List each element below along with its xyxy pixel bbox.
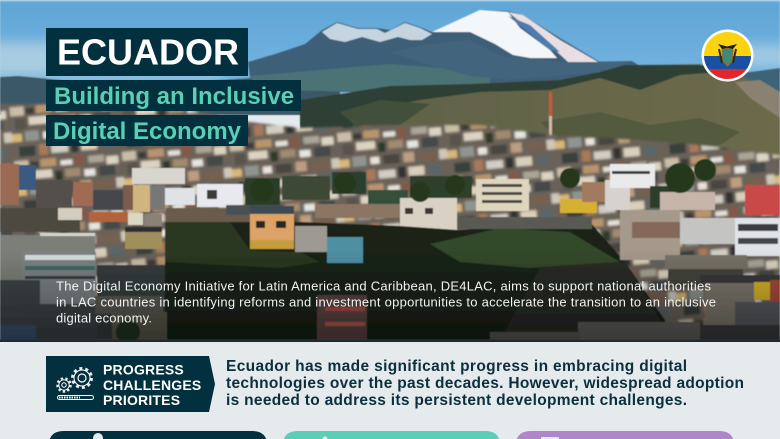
tab: challenges (teal) bbox=[283, 431, 500, 439]
intro paragraph: in LAC countries in identifying reforms and investment opportunities to accelerate the transition to an inclusive bbox=[56, 294, 716, 310]
tab: priorities (purple) bbox=[516, 431, 734, 439]
forested and grassy hill bbox=[300, 64, 780, 160]
banner labels: CHALLENGES bbox=[103, 377, 201, 393]
antenna tower bbox=[549, 92, 552, 142]
icon top bbox=[541, 437, 559, 439]
small red and white building in the foreground bbox=[317, 295, 367, 340]
hero photo: Quito city below a snow-capped volcano bbox=[0, 0, 780, 344]
snow on main volcano bbox=[432, 10, 557, 58]
trees bbox=[116, 159, 716, 344]
intro paragraph: The Digital Economy Initiative for Latin America and Caribbean, DE4LAC, aims to support national authorities bbox=[56, 278, 712, 294]
banner labels: PROGRESS bbox=[103, 362, 184, 378]
rocky cliff on the right bbox=[735, 80, 780, 118]
title block bbox=[46, 28, 301, 146]
banner labels: PRIORITES bbox=[103, 392, 180, 408]
haze at the right horizon bbox=[740, 45, 780, 67]
dark lower hillside bbox=[165, 222, 665, 340]
long wall bbox=[457, 217, 592, 229]
pale haze at the left horizon bbox=[0, 42, 220, 76]
summary statement: is needed to address its persistent development challenges. bbox=[226, 392, 687, 409]
orange house bbox=[250, 206, 294, 249]
intro paragraph: digital economy. bbox=[56, 310, 152, 326]
banner: progress, challenges, priorities bbox=[46, 356, 215, 412]
distant left ridge bbox=[0, 76, 340, 115]
lower green slopes bbox=[250, 64, 490, 92]
summary statement: technologies over the past decades. However, widespread adoption bbox=[226, 375, 744, 392]
retaining wall and left buildings bbox=[0, 227, 167, 340]
city texture bbox=[0, 100, 780, 340]
title: ECUADOR: ECUADOR bbox=[57, 32, 239, 72]
teal building bbox=[295, 226, 363, 263]
subtitle line 1: Building an Inclusive bbox=[54, 83, 294, 110]
distinct mid-city buildings bbox=[0, 164, 780, 256]
lower right buildings bbox=[490, 210, 780, 340]
tree line on the hill bbox=[300, 65, 720, 142]
panel: lower summary section bbox=[0, 342, 780, 439]
mountain range bbox=[248, 10, 640, 92]
darkening at the bottom of the photo bbox=[0, 250, 780, 340]
subtitle line 2: Digital Economy bbox=[53, 118, 242, 145]
icon top bbox=[322, 436, 328, 439]
sky bbox=[0, 0, 780, 112]
icon: Ecuador flag badge bbox=[700, 30, 756, 83]
photo bottom edge bbox=[0, 340, 780, 342]
icon: gears and progress bar bbox=[58, 368, 94, 400]
snow on left peak bbox=[322, 23, 432, 42]
tab: progress (navy) bbox=[49, 431, 267, 439]
summary statement: Ecuador has made significant progress in embracing digital bbox=[226, 358, 687, 375]
distant right ridge bbox=[720, 68, 780, 100]
icon top bbox=[93, 433, 103, 439]
